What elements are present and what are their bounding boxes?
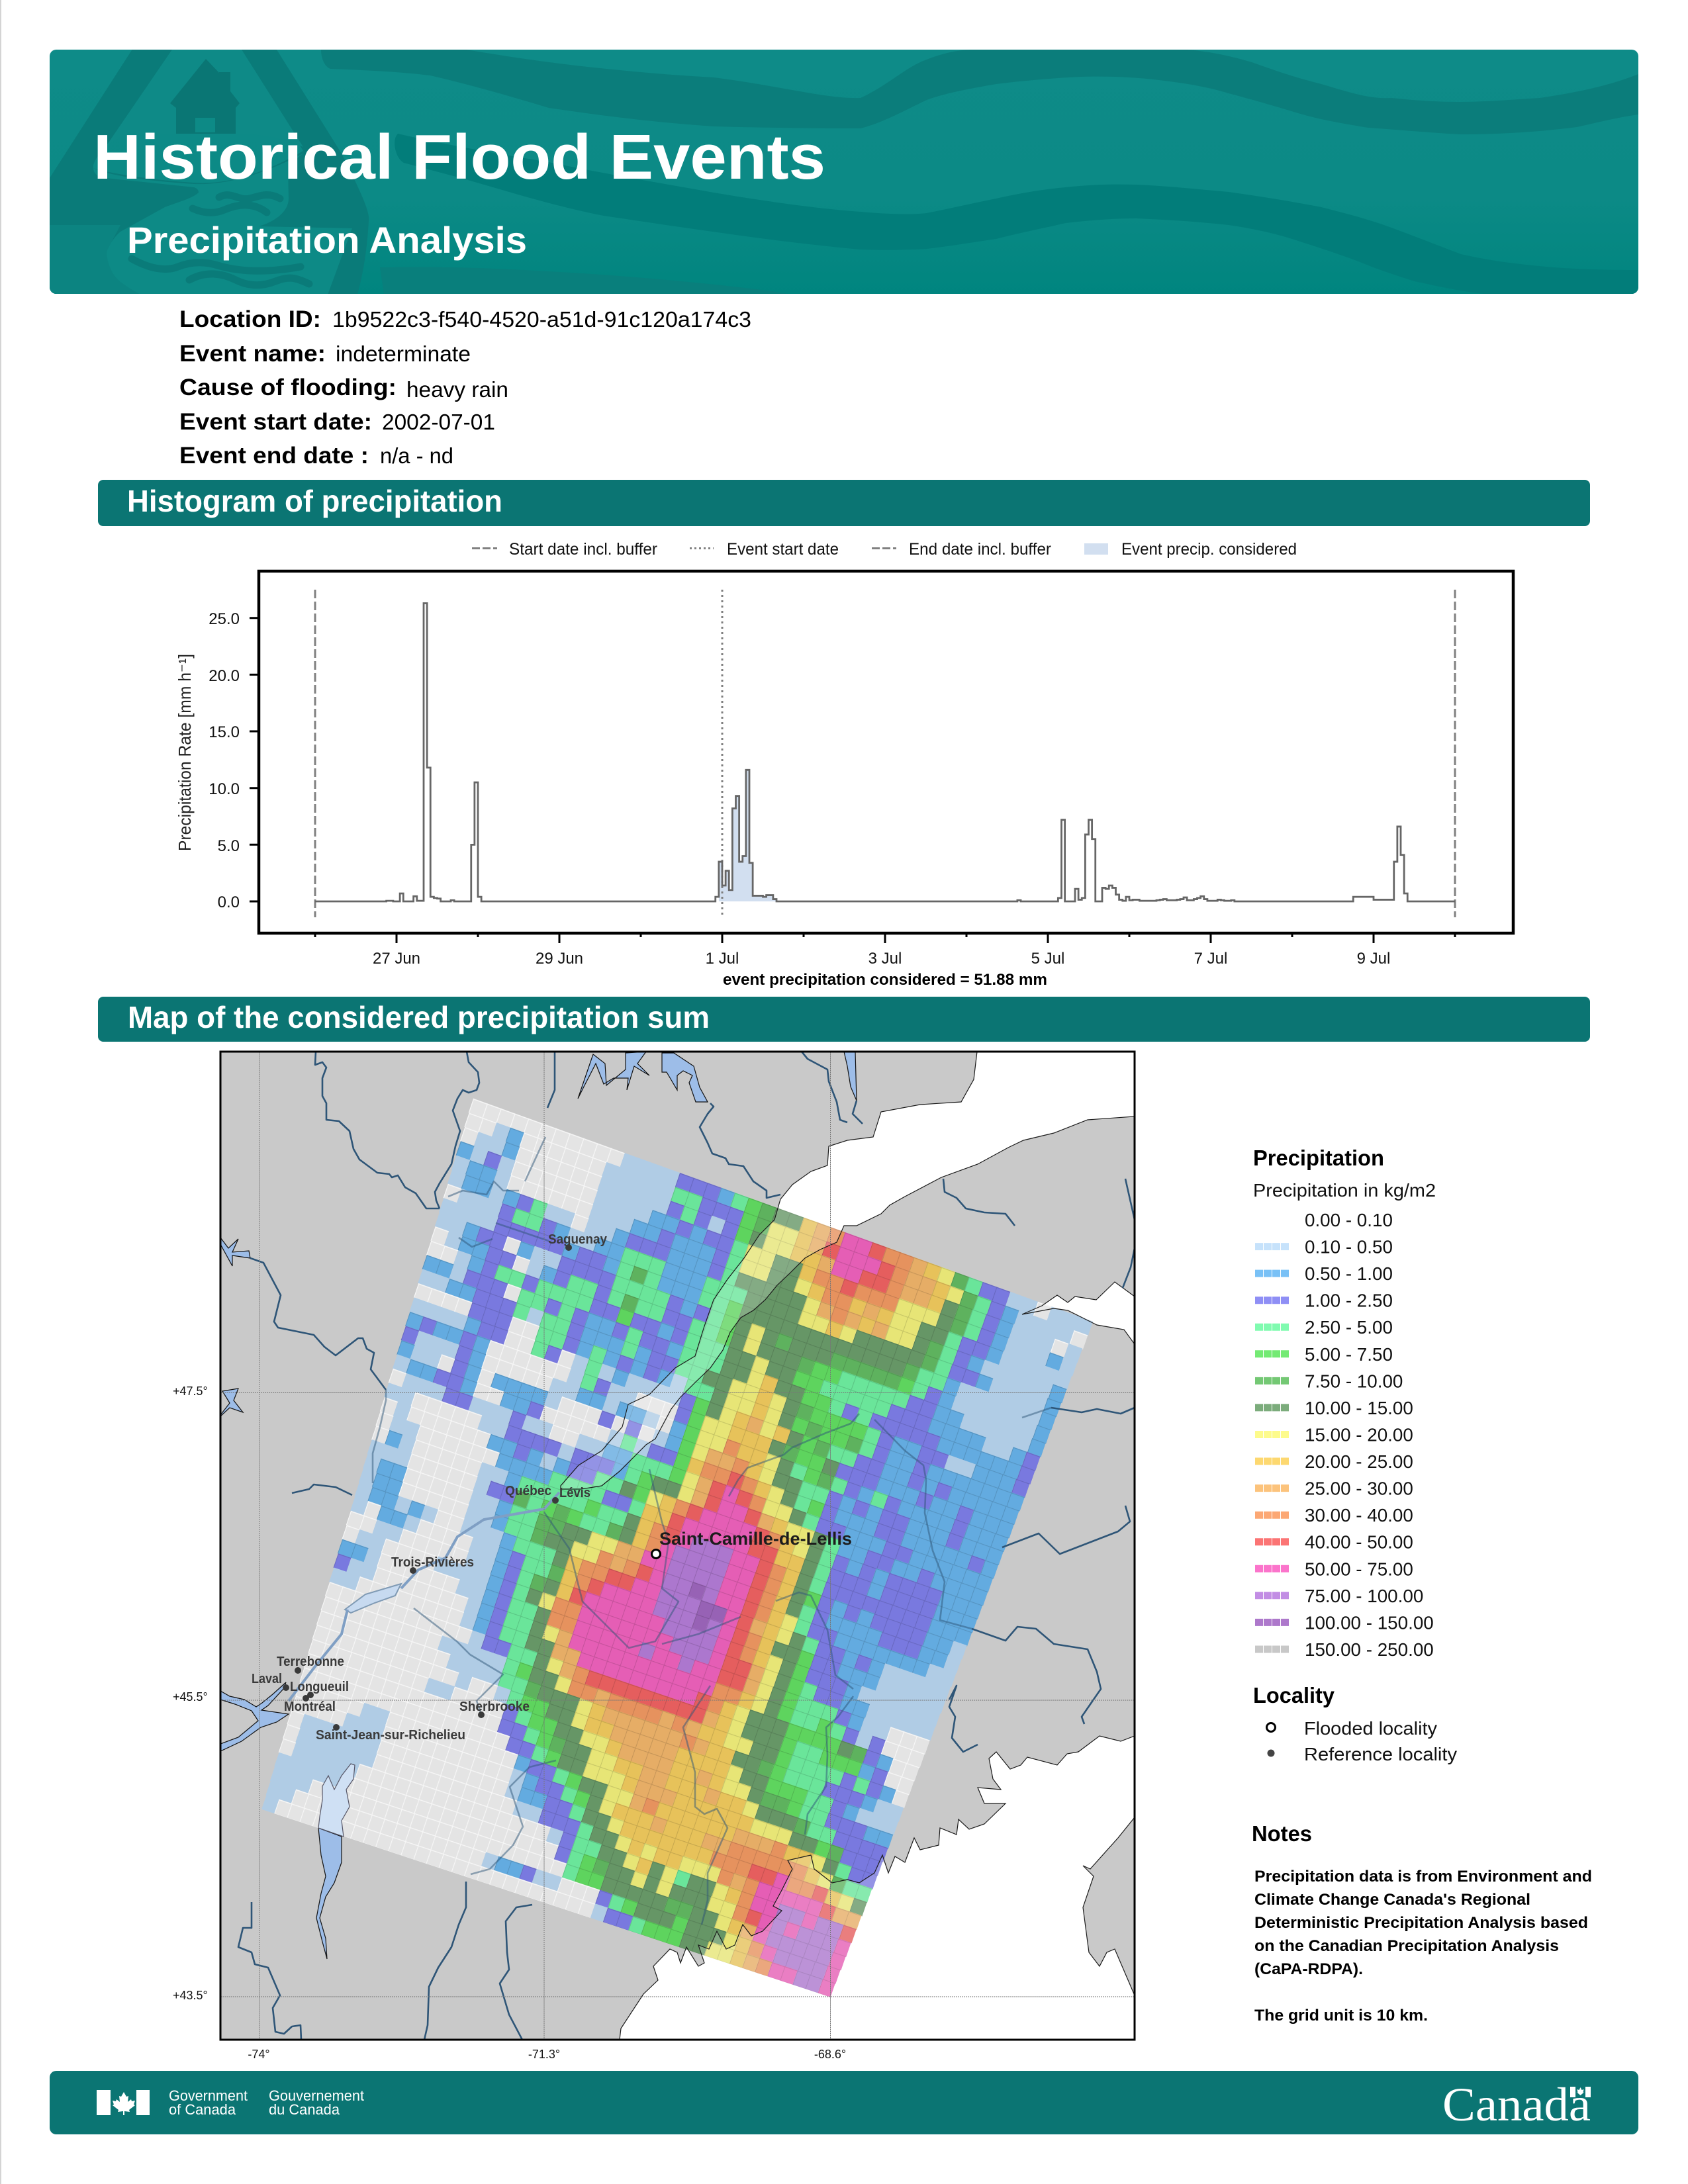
reference localities: Montréal: [284, 1700, 336, 1714]
histogram legend: [472, 540, 1297, 559]
x axis labels: 29 Jun: [536, 950, 583, 968]
event metadata block: n/a - nd: [380, 443, 453, 468]
histogram legend: Event precip. considered: [1121, 540, 1297, 559]
event metadata block: 1b9522c3-f540-4520-a51d-91c120a174c3: [332, 307, 751, 332]
section heading: map: [98, 997, 1590, 1042]
event metadata block: Cause of flooding:: [179, 375, 397, 400]
header banner: [50, 50, 1638, 296]
notes: Notes: [1252, 1821, 1312, 1846]
map coordinate labels: +45.5°: [173, 1690, 208, 1704]
map legend: precipitation: Precipitation: [1253, 1146, 1384, 1170]
y axis labels: 10.0: [209, 780, 240, 798]
map frame: [220, 1052, 1135, 2040]
map legend: precipitation: Precipitation in kg/m2: [1253, 1180, 1436, 1201]
x axis labels: 27 Jun: [373, 950, 420, 968]
map legend: precipitation: 2.50 - 5.00: [1305, 1317, 1393, 1338]
reference localities: [252, 1232, 608, 1743]
reference localities: Longueuil: [290, 1680, 349, 1694]
map legend: locality: Locality: [1253, 1683, 1335, 1707]
map legend: precipitation: 10.00 - 15.00: [1305, 1398, 1413, 1418]
reference date lines: [315, 590, 1455, 917]
reference localities: Québec: [505, 1484, 551, 1498]
map legend: precipitation: [1253, 1146, 1436, 1660]
event metadata block: Event name:: [179, 341, 326, 367]
event metadata block: Event end date :: [179, 443, 369, 469]
reference localities: Trois-Rivières: [391, 1555, 474, 1570]
event metadata block: Event start date:: [179, 409, 372, 435]
histogram legend: Start date incl. buffer: [509, 540, 657, 559]
notes: on the Canadian Precipitation Analysis: [1254, 1937, 1559, 1955]
header background waves and flood icon: [50, 50, 1638, 296]
Government of Canada wordmark: Government: [169, 2087, 248, 2104]
map coordinate labels: -71.3°: [528, 2048, 560, 2061]
map coordinate labels: +47.5°: [173, 1385, 208, 1398]
section heading: map: Map of the considered precipitation sum: [128, 1000, 710, 1034]
reference localities: Laval: [252, 1672, 282, 1686]
Government of Canada wordmark: of Canada: [169, 2101, 236, 2118]
map coordinate labels: -68.6°: [814, 2048, 846, 2061]
precipitation grid: [264, 1105, 1090, 1990]
event metadata block: Location ID:: [179, 306, 321, 332]
rivers: [238, 1052, 1135, 2040]
map legend: precipitation: 50.00 - 75.00: [1305, 1559, 1413, 1579]
map legend: precipitation: 25.00 - 30.00: [1305, 1479, 1413, 1499]
notes: Climate Change Canada's Regional: [1254, 1891, 1530, 1909]
map legend: precipitation: 100.00 - 150.00: [1305, 1612, 1434, 1633]
map legend: precipitation: 0.50 - 1.00: [1305, 1263, 1393, 1284]
map legend: precipitation: 0.00 - 0.10: [1305, 1210, 1393, 1230]
event metadata block: [179, 306, 751, 469]
event precipitation fill: [719, 770, 776, 901]
map legend: precipitation: 150.00 - 250.00: [1305, 1639, 1434, 1660]
map legend: precipitation: 0.10 - 0.50: [1305, 1237, 1393, 1257]
notes: (CaPA-RDPA).: [1254, 1960, 1363, 1978]
map legend: precipitation: 75.00 - 100.00: [1305, 1586, 1423, 1606]
subtitle: Precipitation Analysis: [127, 219, 527, 261]
icon: Government of Canada flag: [97, 2090, 150, 2115]
title: Historical Flood Events: [93, 122, 825, 193]
Canada wordmark: Canada: [1442, 2078, 1591, 2131]
y axis labels: 20.0: [209, 667, 240, 685]
notes: The grid unit is 10 km.: [1254, 2007, 1428, 2025]
map legend: precipitation: 7.50 - 10.00: [1305, 1371, 1403, 1391]
section heading: histogram: [98, 480, 1590, 526]
lakes outside the grid: [220, 1052, 857, 1959]
x axis labels: 5 Jul: [1031, 950, 1064, 968]
reference localities: Lévis: [559, 1486, 590, 1500]
map coordinate labels: [173, 1385, 846, 2061]
lakes and river inside the grid: [289, 1492, 559, 1837]
Government of Canada wordmark: du Canada: [269, 2101, 340, 2118]
event metadata block: heavy rain: [406, 377, 508, 402]
event metadata block: 2002-07-01: [382, 410, 495, 434]
y axis title: Precipitation Rate [mm h⁻¹]: [175, 654, 195, 851]
flooded locality marker and label: [651, 1529, 852, 1558]
y axis labels: 15.0: [209, 723, 240, 741]
map coordinate labels: +43.5°: [173, 1989, 208, 2002]
histogram chart: [175, 571, 1513, 989]
precipitation map: [220, 1052, 1135, 2040]
y axis labels: 25.0: [209, 610, 240, 628]
graticule lines: [221, 1052, 1134, 2039]
map legend: precipitation: 20.00 - 25.00: [1305, 1451, 1413, 1472]
flooded locality marker and label: Saint-Camille-de-Lellis: [659, 1529, 852, 1549]
event precipitation total: event precipitation considered = 51.88 mm: [723, 971, 1047, 989]
water: estuary and bays: [561, 1052, 1135, 2040]
map legend: precipitation: 40.00 - 50.00: [1305, 1532, 1413, 1553]
event metadata block: indeterminate: [336, 341, 471, 366]
notes: Precipitation data is from Environment and: [1254, 1868, 1592, 1886]
x axis labels: 1 Jul: [706, 950, 739, 968]
footer band: [50, 2071, 1638, 2134]
x axis labels: 7 Jul: [1194, 950, 1227, 968]
x axis labels: [373, 950, 1390, 968]
histogram legend: End date incl. buffer: [909, 540, 1051, 559]
Government of Canada wordmark: [169, 2087, 364, 2118]
map legend: locality: Flooded locality: [1304, 1718, 1437, 1739]
y axis labels: 0.0: [218, 893, 240, 911]
axis ticks: [250, 618, 1455, 943]
reference localities: Saint-Jean-sur-Richelieu: [316, 1728, 465, 1743]
y axis labels: [209, 610, 240, 911]
map legend: precipitation: 15.00 - 20.00: [1305, 1424, 1413, 1445]
section heading: histogram: Histogram of precipitation: [127, 484, 502, 518]
notes: [1252, 1821, 1592, 2025]
map coordinate labels: -74°: [248, 2048, 270, 2061]
water brightening and coast outlines over the grid: [561, 1052, 1135, 2040]
histogram legend: Event start date: [727, 540, 839, 559]
Government of Canada wordmark: Gouvernement: [269, 2087, 364, 2104]
map legend: precipitation: 5.00 - 7.50: [1305, 1344, 1393, 1365]
precipitation step line: [315, 603, 1455, 901]
map legend: precipitation: 1.00 - 2.50: [1305, 1291, 1393, 1311]
map legend: locality: [1253, 1683, 1457, 1764]
map legend: precipitation: 30.00 - 40.00: [1305, 1505, 1413, 1525]
notes: Deterministic Precipitation Analysis based: [1254, 1914, 1588, 1932]
reference localities: Terrebonne: [277, 1655, 344, 1669]
reference localities: Sherbrooke: [459, 1700, 530, 1714]
y axis labels: 5.0: [218, 837, 240, 855]
x axis labels: 3 Jul: [868, 950, 902, 968]
x axis labels: 9 Jul: [1357, 950, 1390, 968]
reference localities: Saguenay: [548, 1232, 608, 1247]
map legend: locality: Reference locality: [1304, 1744, 1457, 1764]
